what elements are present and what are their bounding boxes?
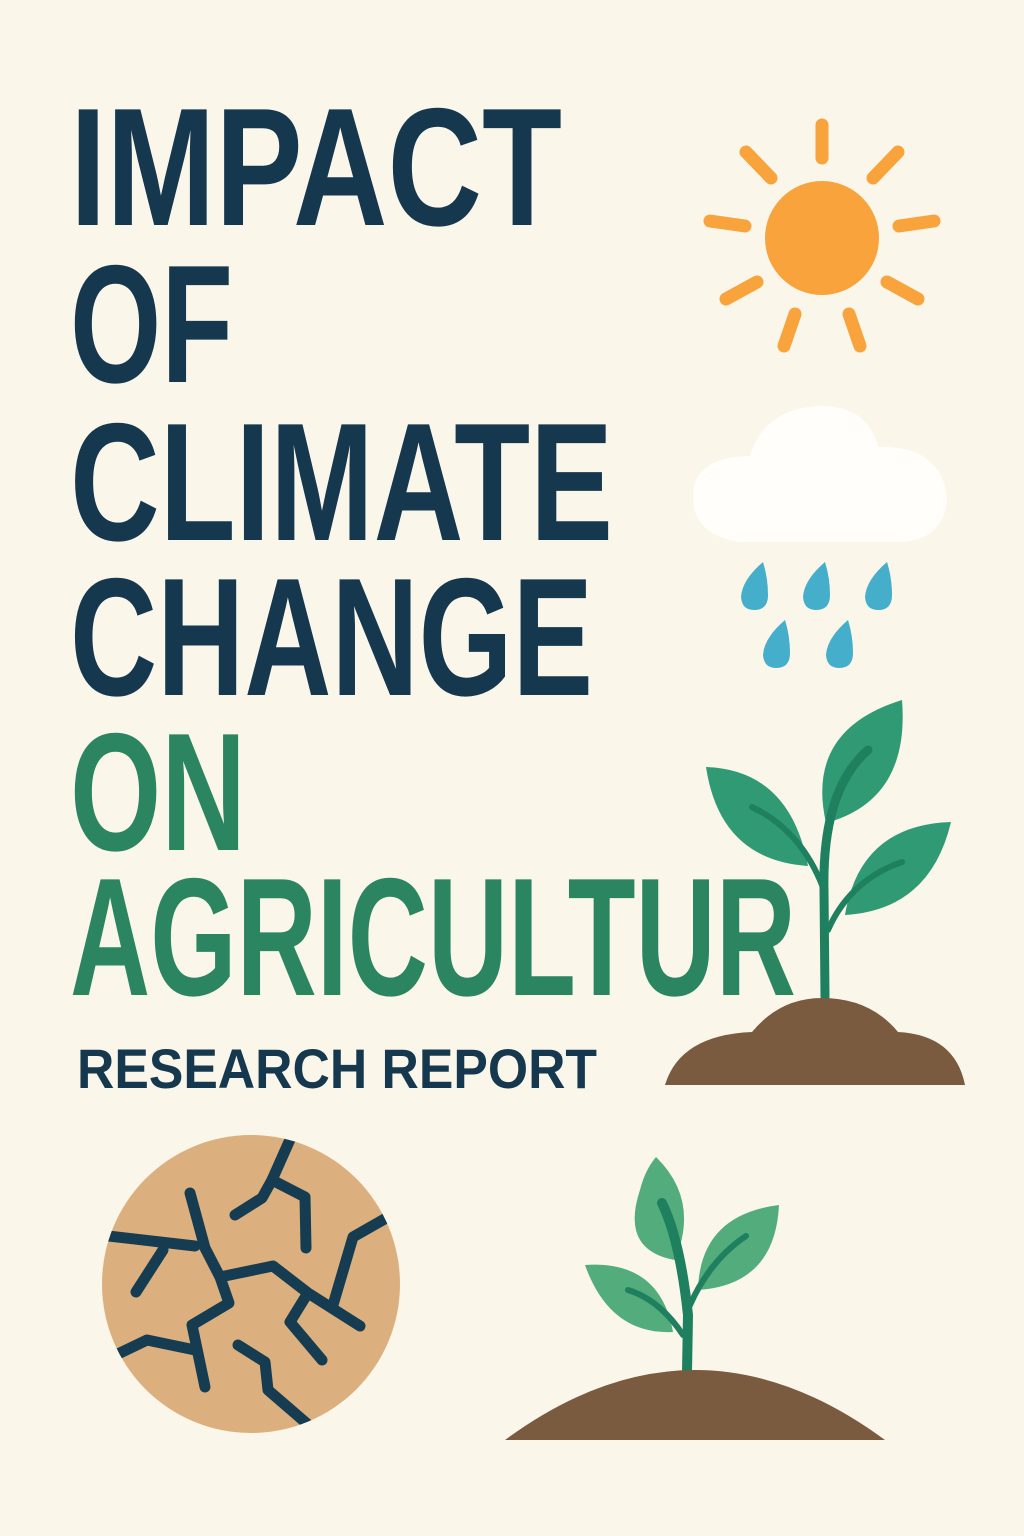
title: CLIMATE bbox=[70, 388, 613, 576]
icon: cracked earth bbox=[95, 1135, 400, 1433]
title: CHANGE bbox=[70, 543, 593, 731]
title: IMPACT bbox=[70, 73, 562, 261]
soil mound bbox=[665, 998, 965, 1085]
icon: large plant bbox=[665, 700, 965, 1085]
icon: rain drops bbox=[741, 562, 892, 668]
subtitle: RESEARCH REPORT bbox=[77, 1037, 597, 1100]
icon: sun bbox=[710, 125, 934, 346]
icon: cloud bbox=[693, 406, 947, 542]
title: OF bbox=[70, 230, 233, 418]
title: ON bbox=[70, 698, 246, 886]
title bbox=[70, 73, 796, 1031]
icon: small plant bbox=[505, 1157, 885, 1440]
soil mound small bbox=[505, 1370, 885, 1440]
